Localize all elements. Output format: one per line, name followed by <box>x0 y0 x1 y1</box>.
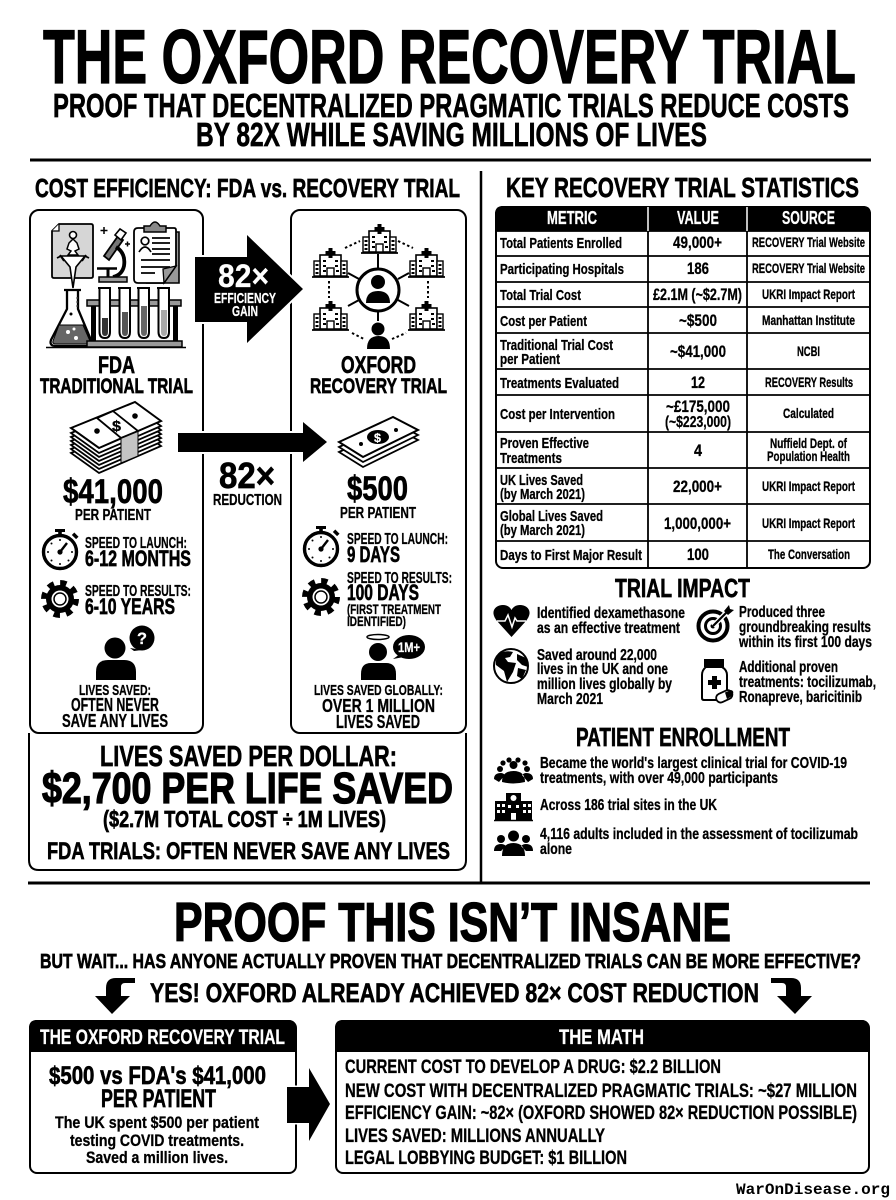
impact: additional treatments: Additional proven <box>739 659 838 676</box>
row: total cost <box>500 285 855 304</box>
enrollment: largest trial <box>494 755 847 787</box>
impact: lives saved <box>494 647 672 708</box>
row: hospitals <box>500 259 865 278</box>
row: total cost: £2.1M (~$2.7M) <box>653 285 742 304</box>
FDA speed to launch: 6-12 MONTHS <box>85 546 191 571</box>
FDA speed to results: 6-10 YEARS <box>85 594 175 619</box>
heading: trial impact: TRIAL IMPACT <box>615 573 750 603</box>
row: global lives saved: 1,000,000+ <box>664 514 731 533</box>
panel: the math: LEGAL LOBBYING BUDGET: $1 BILLION <box>345 1147 627 1169</box>
row: proven treatments: Treatments <box>500 450 562 467</box>
panel: outer frame <box>29 733 466 870</box>
callout: lives saved per dollar: LIVES SAVED PER DOLLAR: <box>100 741 397 773</box>
panel: the Oxford recovery trial: Saved a million lives. <box>86 1148 228 1167</box>
callout: lives saved per dollar: ($2.7M TOTAL COST ÷ 1M LIVES) <box>103 806 386 832</box>
label: Oxford recovery trial: OXFORD <box>341 352 416 379</box>
row: traditional cost: NCBI <box>797 343 820 359</box>
arrow: trial to math <box>287 1068 330 1141</box>
Oxford speed to launch: SPEED TO LAUNCH: <box>347 531 448 548</box>
impact: additional treatments <box>702 659 876 706</box>
table: key statistics <box>495 206 871 568</box>
FDA speed to launch: SPEED TO LAUNCH: <box>85 535 187 552</box>
icon: large cash stack: $ <box>112 418 122 435</box>
panel: the math: THE MATH <box>559 1026 644 1049</box>
row: traditional cost: per Patient <box>500 351 560 368</box>
row: total patients: 49,000+ <box>673 233 722 252</box>
arrow: right down <box>771 978 812 1014</box>
panel: FDA traditional trial <box>30 210 203 733</box>
row: proven treatments: Nuffield Dept. of <box>770 435 847 451</box>
Oxford speed to results: 100 DAYS <box>347 580 419 605</box>
table header: METRIC <box>547 208 597 228</box>
row: cost per intervention: (~$223,000) <box>665 414 731 431</box>
row: total patients <box>500 233 865 252</box>
panel: the Oxford recovery trial: $500 vs FDA's $41,000 <box>49 1062 266 1090</box>
Oxford speed to results: IDENTIFIED) <box>347 613 406 629</box>
panel: cost efficiency comparison <box>29 173 466 870</box>
enrollment: largest trial: treatments, with over 49,000 participants <box>540 770 778 787</box>
callout: lives saved per dollar: FDA TRIALS: OFTEN NEVER SAVE ANY LIVES <box>47 838 450 865</box>
row: UK lives saved: (by March 2021) <box>500 486 585 503</box>
row: UK lives saved <box>500 472 855 503</box>
Oxford lives saved <box>314 682 443 732</box>
enrollment: trial sites <box>494 793 718 820</box>
panel: trial impact <box>493 573 876 708</box>
heading: cost efficiency: COST EFFICIENCY: FDA vs. RECOVERY TRIAL <box>35 173 460 203</box>
panel: the math: LIVES SAVED: MILLIONS ANNUALLY <box>345 1125 605 1147</box>
row: treatments evaluated: Treatments Evaluated <box>500 375 619 392</box>
heading: proof this isn't insane: PROOF THIS ISN’T INSANE <box>174 891 731 953</box>
row: total cost: UKRI Impact Report <box>762 286 855 302</box>
impact: lives saved: lives in the UK and one <box>537 661 668 678</box>
row: treatments evaluated: 12 <box>691 373 705 392</box>
callout: 82x reduction: 82× <box>219 455 275 496</box>
row: cost per patient: Manhattan Institute <box>762 312 855 328</box>
row: UK lives saved: 22,000+ <box>673 477 722 496</box>
row: cost per patient: ~$500 <box>679 311 717 330</box>
impact: lives saved: March 2021 <box>537 691 603 708</box>
enrollment: trial sites: Across 186 trial sites in the UK <box>540 797 718 814</box>
impact: lives saved: million lives globally by <box>537 676 672 693</box>
panel: Oxford recovery trial <box>291 210 466 733</box>
row: cost per intervention: Calculated <box>783 405 834 421</box>
cost: FDA per patient: PER PATIENT <box>75 507 151 524</box>
row: proven treatments: 4 <box>694 441 702 460</box>
impact: three results: Produced three <box>739 604 825 621</box>
arrow: 82x reduction <box>178 422 327 462</box>
row: treatments evaluated <box>500 373 853 392</box>
Oxford lives saved: LIVES SAVED GLOBALLY: <box>314 682 443 699</box>
row: proven treatments <box>500 435 850 467</box>
cost: Oxford per patient: $500 <box>347 470 408 508</box>
row: days to first result <box>500 545 850 564</box>
callout: 82x reduction <box>213 455 282 509</box>
row: total patients: Total Patients Enrolled <box>500 235 622 252</box>
subtitle <box>53 87 849 153</box>
row: cost per intervention <box>500 397 834 431</box>
label: FDA traditional trial: TRADITIONAL TRIAL <box>40 375 193 398</box>
row: global lives saved: UKRI Impact Report <box>762 515 855 531</box>
row: cost per patient: Cost per Patient <box>500 313 587 330</box>
table header: VALUE <box>677 208 719 228</box>
row: global lives saved <box>500 508 855 539</box>
icon: person with halo: 1M+ <box>398 639 420 655</box>
panel: the Oxford recovery trial: testing COVID treatments. <box>70 1131 244 1150</box>
arrow: efficiency gain: GAIN <box>232 303 258 320</box>
row: proven treatments: Population Health <box>767 448 850 464</box>
panel: the Oxford recovery trial: THE OXFORD RECOVERY TRIAL <box>40 1026 285 1049</box>
cost: FDA per patient: $41,000 <box>63 473 163 511</box>
arrow: efficiency gain: 82× <box>218 258 269 294</box>
FDA speed to results: SPEED TO RESULTS: <box>85 583 191 600</box>
panel: the math <box>335 1020 869 1173</box>
icon: hospital network <box>312 224 445 349</box>
subtitle: BY 82X WHILE SAVING MILLIONS OF LIVES <box>196 116 707 153</box>
enrollment: tocilizumab assessment: alone <box>540 841 572 858</box>
icon: small cash stack <box>339 417 418 467</box>
row: traditional cost <box>500 337 820 368</box>
panel: the Oxford recovery trial: PER PATIENT <box>101 1085 216 1113</box>
callout: 82x reduction: REDUCTION <box>213 492 282 509</box>
FDA speed to results <box>44 583 191 619</box>
FDA lives saved: LIVES SAVED: <box>79 682 151 699</box>
panel: patient enrollment <box>494 722 858 858</box>
label: FDA traditional trial: FDA <box>98 352 135 379</box>
row: cost per patient <box>500 311 855 330</box>
icon: lab equipment <box>46 222 186 348</box>
FDA speed to launch <box>44 529 191 571</box>
label: Oxford recovery trial: RECOVERY TRIAL <box>310 375 447 398</box>
row: proven treatments: Proven Effective <box>500 435 589 452</box>
icon: person with halo <box>361 634 425 680</box>
panel: the math: CURRENT COST TO DEVELOP A DRUG: $2.2 BILLION <box>345 1056 721 1078</box>
Oxford speed to results <box>306 570 452 629</box>
cost: Oxford per patient <box>340 470 416 522</box>
row: days to first result: Days to First Major Result <box>500 547 642 564</box>
icon: large cash stack <box>71 402 161 473</box>
arrow: efficiency gain <box>195 235 303 343</box>
row: global lives saved: Global Lives Saved <box>500 508 603 525</box>
row: UK lives saved: UK Lives Saved <box>500 472 583 489</box>
impact: dexamethasone <box>493 605 685 637</box>
row: cost per intervention: Cost per Intervention <box>500 406 615 423</box>
impact: dexamethasone: Identified dexamethasone <box>537 605 685 622</box>
callout: lives saved per dollar: $2,700 PER LIFE SAVED <box>42 764 453 813</box>
row: days to first result: The Conversation <box>768 546 850 562</box>
row: hospitals: Participating Hospitals <box>500 261 624 278</box>
row: treatments evaluated: RECOVERY Results <box>765 374 853 390</box>
row: total cost: Total Trial Cost <box>500 287 581 304</box>
Oxford speed to launch: 9 DAYS <box>347 542 400 567</box>
Oxford lives saved: OVER 1 MILLION <box>322 696 435 716</box>
row: cost per intervention: ~£175,000 <box>666 397 730 416</box>
Oxford lives saved: LIVES SAVED <box>336 712 420 732</box>
label: FDA traditional trial <box>40 352 193 398</box>
callout: lives saved per dollar <box>42 741 453 865</box>
impact: dexamethasone: as an effective treatment <box>537 620 680 637</box>
FDA lives saved: SAVE ANY LIVES <box>62 711 168 731</box>
FDA lives saved <box>62 682 168 731</box>
panel: the Oxford recovery trial <box>29 1020 296 1173</box>
row: days to first result: 100 <box>687 545 709 564</box>
table header: SOURCE <box>782 208 835 228</box>
icon: small cash stack: $ <box>374 431 381 445</box>
cost: FDA per patient <box>63 473 163 524</box>
table header <box>547 208 835 228</box>
Oxford speed to results: (FIRST TREATMENT <box>347 601 441 617</box>
row: UK lives saved: UKRI Impact Report <box>762 478 855 494</box>
enrollment: tocilizumab assessment <box>494 826 858 858</box>
panel: the Oxford recovery trial: The UK spent $500 per patient <box>55 1113 259 1132</box>
Oxford speed to launch <box>304 526 448 567</box>
impact: lives saved: Saved around 22,000 <box>537 647 657 664</box>
icon: person with question: ? <box>137 629 147 648</box>
Oxford speed to results: SPEED TO RESULTS: <box>347 570 452 587</box>
cost: Oxford per patient: PER PATIENT <box>340 505 416 522</box>
arrow: left down <box>95 978 135 1014</box>
arrow: efficiency gain: EFFICIENCY <box>214 290 276 307</box>
row: global lives saved: (by March 2021) <box>500 522 585 539</box>
row: traditional cost: ~$41,000 <box>670 342 726 361</box>
footer: website: WarOnDisease.org <box>736 1181 890 1199</box>
icon: person with question <box>96 626 154 680</box>
row: hospitals: 186 <box>687 259 709 278</box>
FDA lives saved: OFTEN NEVER <box>71 695 159 715</box>
heading: patient enrollment: PATIENT ENROLLMENT <box>576 722 790 752</box>
impact: three results <box>698 604 872 651</box>
label: Oxford recovery trial <box>310 352 447 398</box>
row: traditional cost: Traditional Trial Cost <box>500 337 613 354</box>
